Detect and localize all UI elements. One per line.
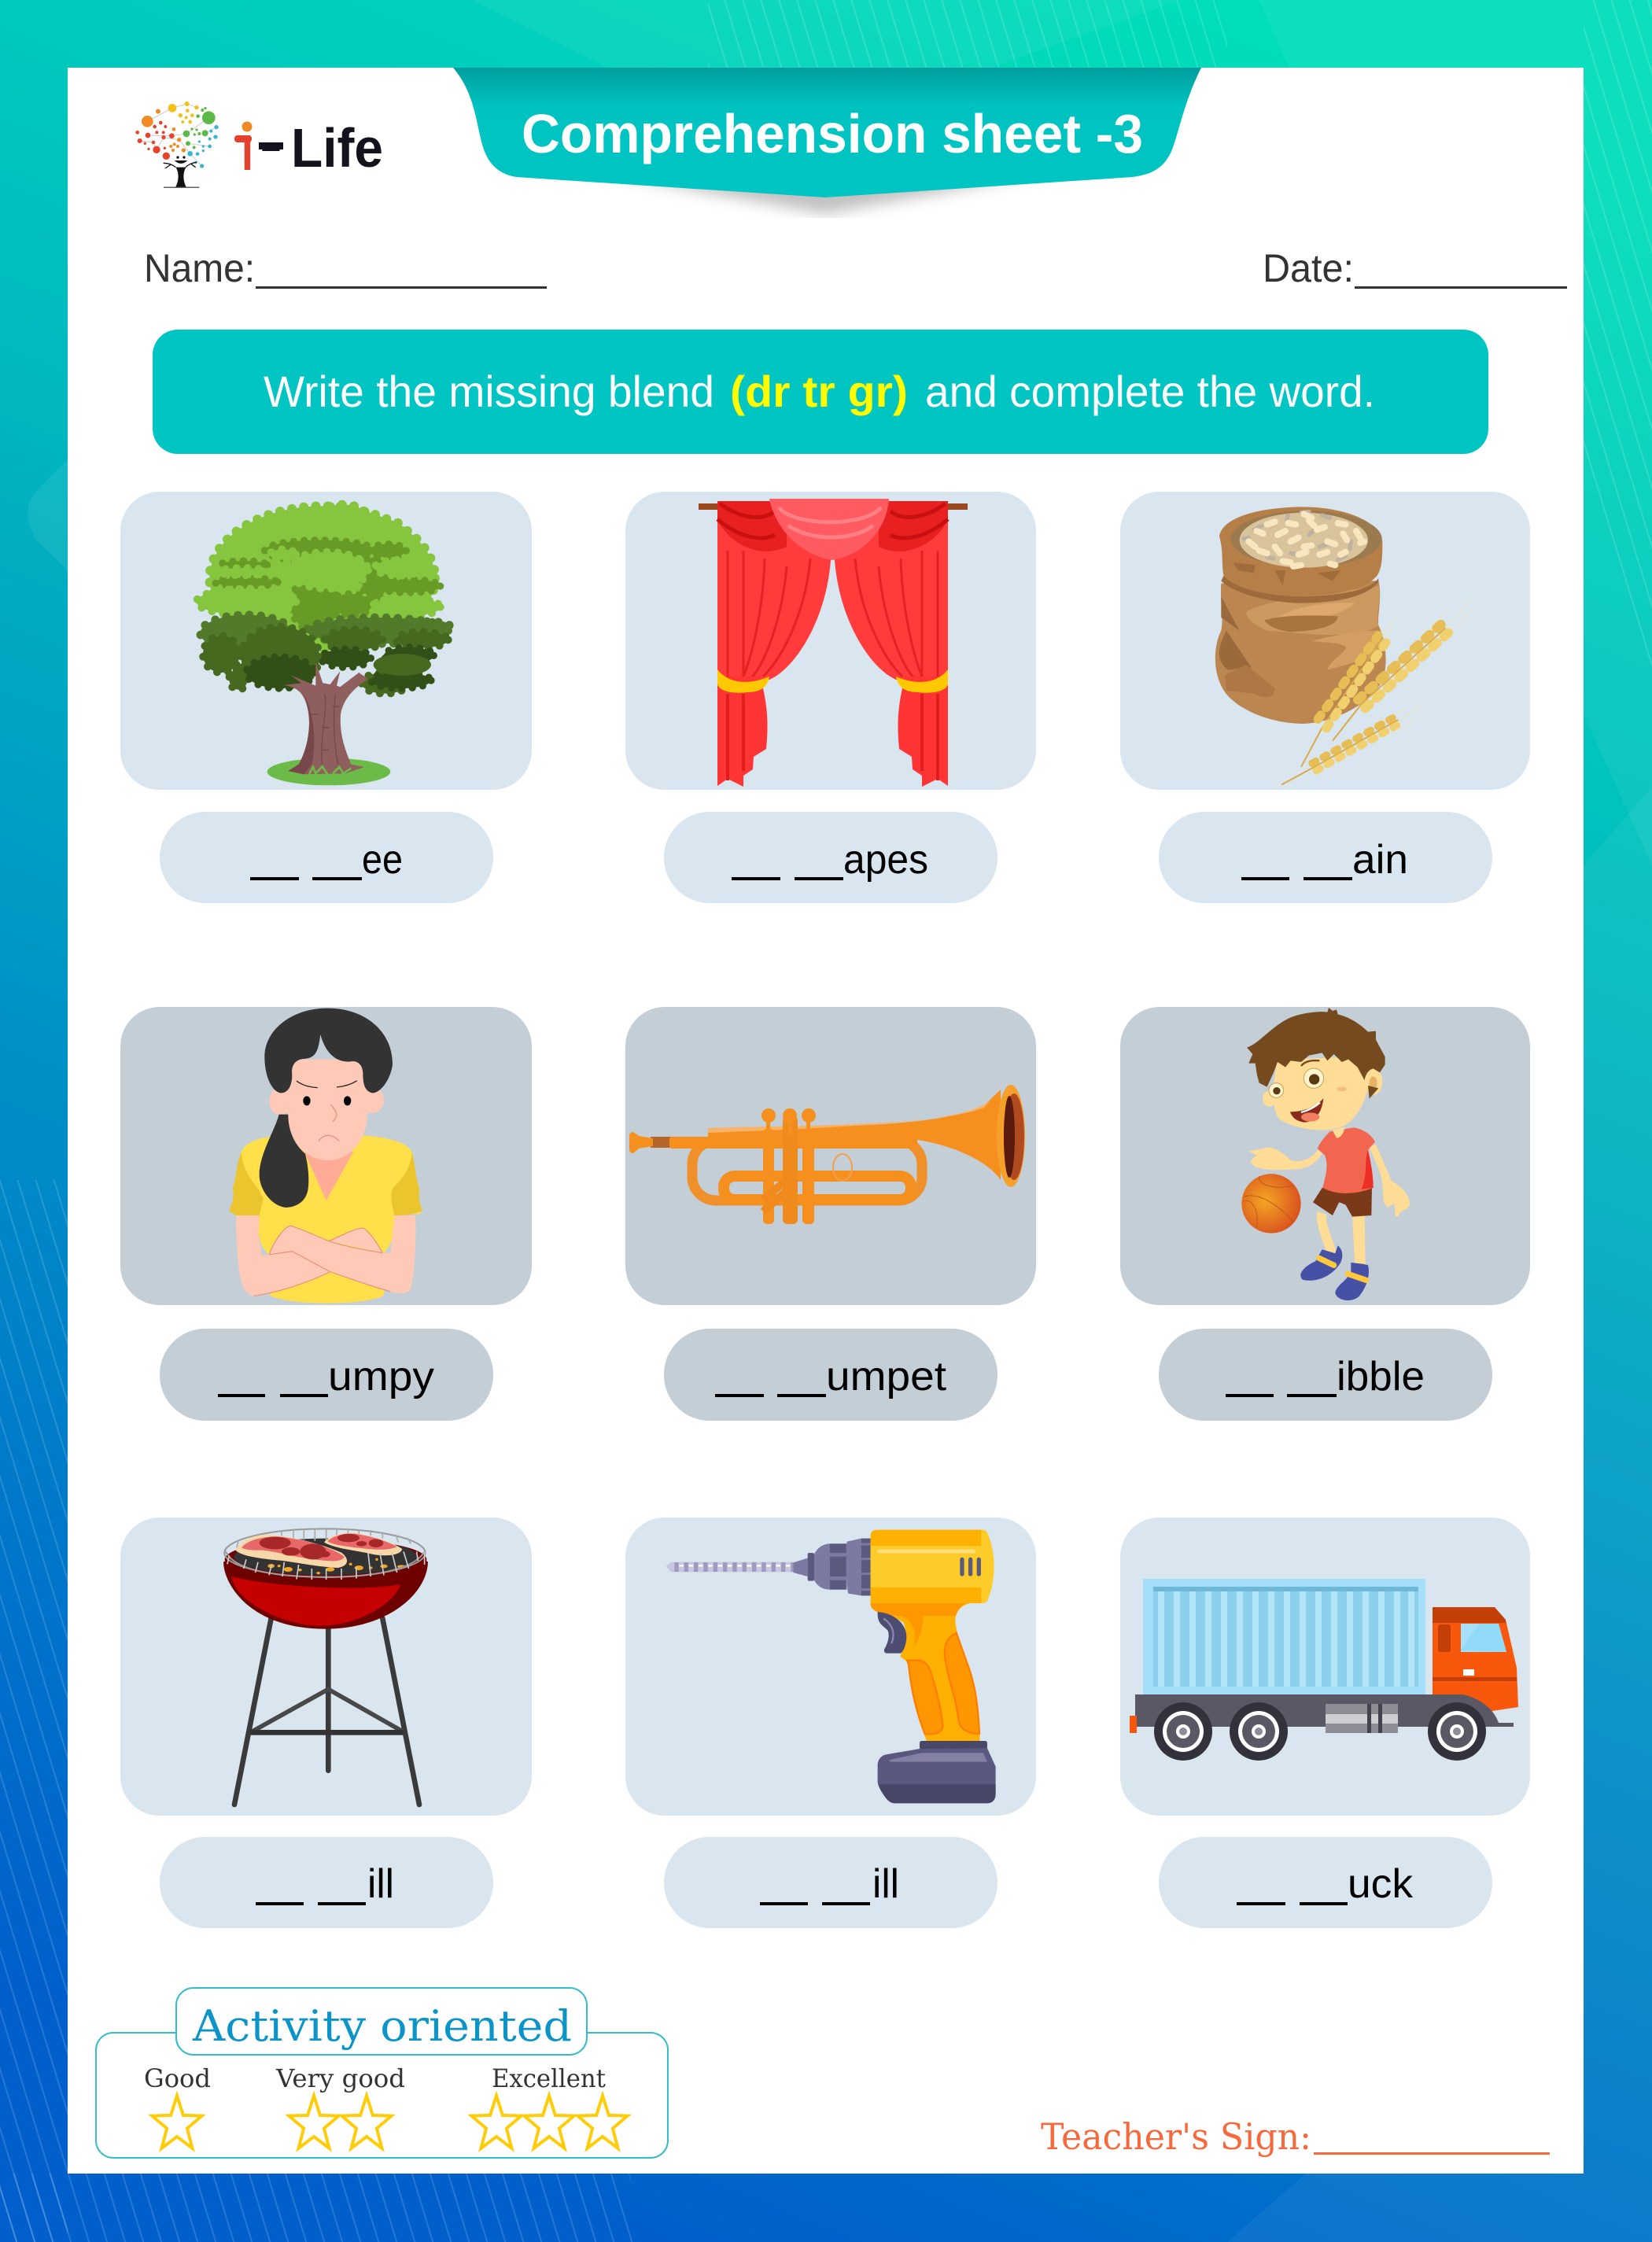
- answer pill: [664, 1329, 997, 1421]
- icon: tree: [197, 505, 449, 785]
- rating labels: Good: [144, 2063, 211, 2093]
- teacher's signature: Teacher's Sign:: [1041, 2115, 1311, 2158]
- instruction text: (dr tr gr): [730, 367, 908, 416]
- answer pill: uck: [1348, 1861, 1414, 1907]
- answer pill: [1159, 1329, 1492, 1421]
- panel: grumpy card: [120, 1007, 532, 1421]
- name field: [144, 246, 547, 290]
- answer pill: umpy: [328, 1354, 434, 1399]
- icon: colourful tree: [135, 101, 219, 188]
- answer pill: apes: [843, 837, 928, 883]
- panel: drill card: [625, 1517, 1036, 1928]
- logo: i-Life: [135, 101, 383, 188]
- answer pill: [664, 812, 997, 903]
- date field: [1263, 246, 1567, 290]
- answer pill: [160, 812, 493, 903]
- panel: dribble card: [1120, 1007, 1530, 1421]
- icon: sack of grain with wheat: [1215, 507, 1470, 785]
- panel: truck card: [1120, 1517, 1530, 1928]
- answer pill: ill: [367, 1861, 394, 1907]
- icon: container truck: [1130, 1579, 1518, 1761]
- instruction text: Write the missing blend: [264, 367, 714, 416]
- icon: grumpy woman: [229, 1009, 422, 1304]
- answer pill: ibble: [1337, 1354, 1425, 1399]
- icon: power drill: [666, 1530, 996, 1803]
- icon: boy dribbling a ball: [1241, 1008, 1410, 1300]
- title banner: [453, 68, 1201, 214]
- panel: tree card: [120, 492, 532, 903]
- icon: barbecue grill: [223, 1528, 428, 1805]
- panel: activity rating: [96, 1988, 668, 2158]
- answer pill: umpet: [826, 1354, 947, 1399]
- name field: Name:: [144, 246, 255, 290]
- heading: Activity oriented: [176, 1988, 587, 2055]
- teacher's signature: [1041, 2115, 1550, 2158]
- answer pill: [160, 1329, 493, 1421]
- answer pill: ain: [1352, 837, 1408, 883]
- rating labels: [144, 2063, 606, 2093]
- answer pill: [1159, 812, 1492, 903]
- instruction text: [264, 367, 1375, 416]
- logo wordmark: i: [242, 120, 253, 182]
- heading: Activity oriented: Activity oriented: [192, 2001, 572, 2051]
- panel: grill card: [120, 1517, 532, 1928]
- date field: Date:: [1263, 246, 1354, 290]
- answer pill: [1159, 1837, 1492, 1928]
- logo wordmark: Life: [291, 117, 383, 179]
- rating labels: Very good: [275, 2063, 405, 2093]
- answer pill: ill: [872, 1861, 899, 1907]
- icon: trumpet: [629, 1085, 1025, 1224]
- answer pill: [160, 1837, 493, 1928]
- title: Comprehension sheet -3: [522, 103, 1143, 164]
- panel: trumpet card: [625, 1007, 1036, 1421]
- rating stars: [152, 2096, 628, 2148]
- instruction bar: [153, 330, 1488, 454]
- panel: drapes card: [625, 492, 1036, 903]
- answer pill: [664, 1837, 997, 1928]
- panel: grain card: [1120, 492, 1530, 903]
- icon: red curtains: [699, 499, 968, 787]
- logo wordmark: [234, 112, 383, 182]
- instruction text: and complete the word.: [925, 367, 1375, 416]
- logo wordmark: -: [260, 112, 282, 174]
- rating labels: Excellent: [492, 2063, 606, 2093]
- answer pill: ee: [362, 837, 403, 883]
